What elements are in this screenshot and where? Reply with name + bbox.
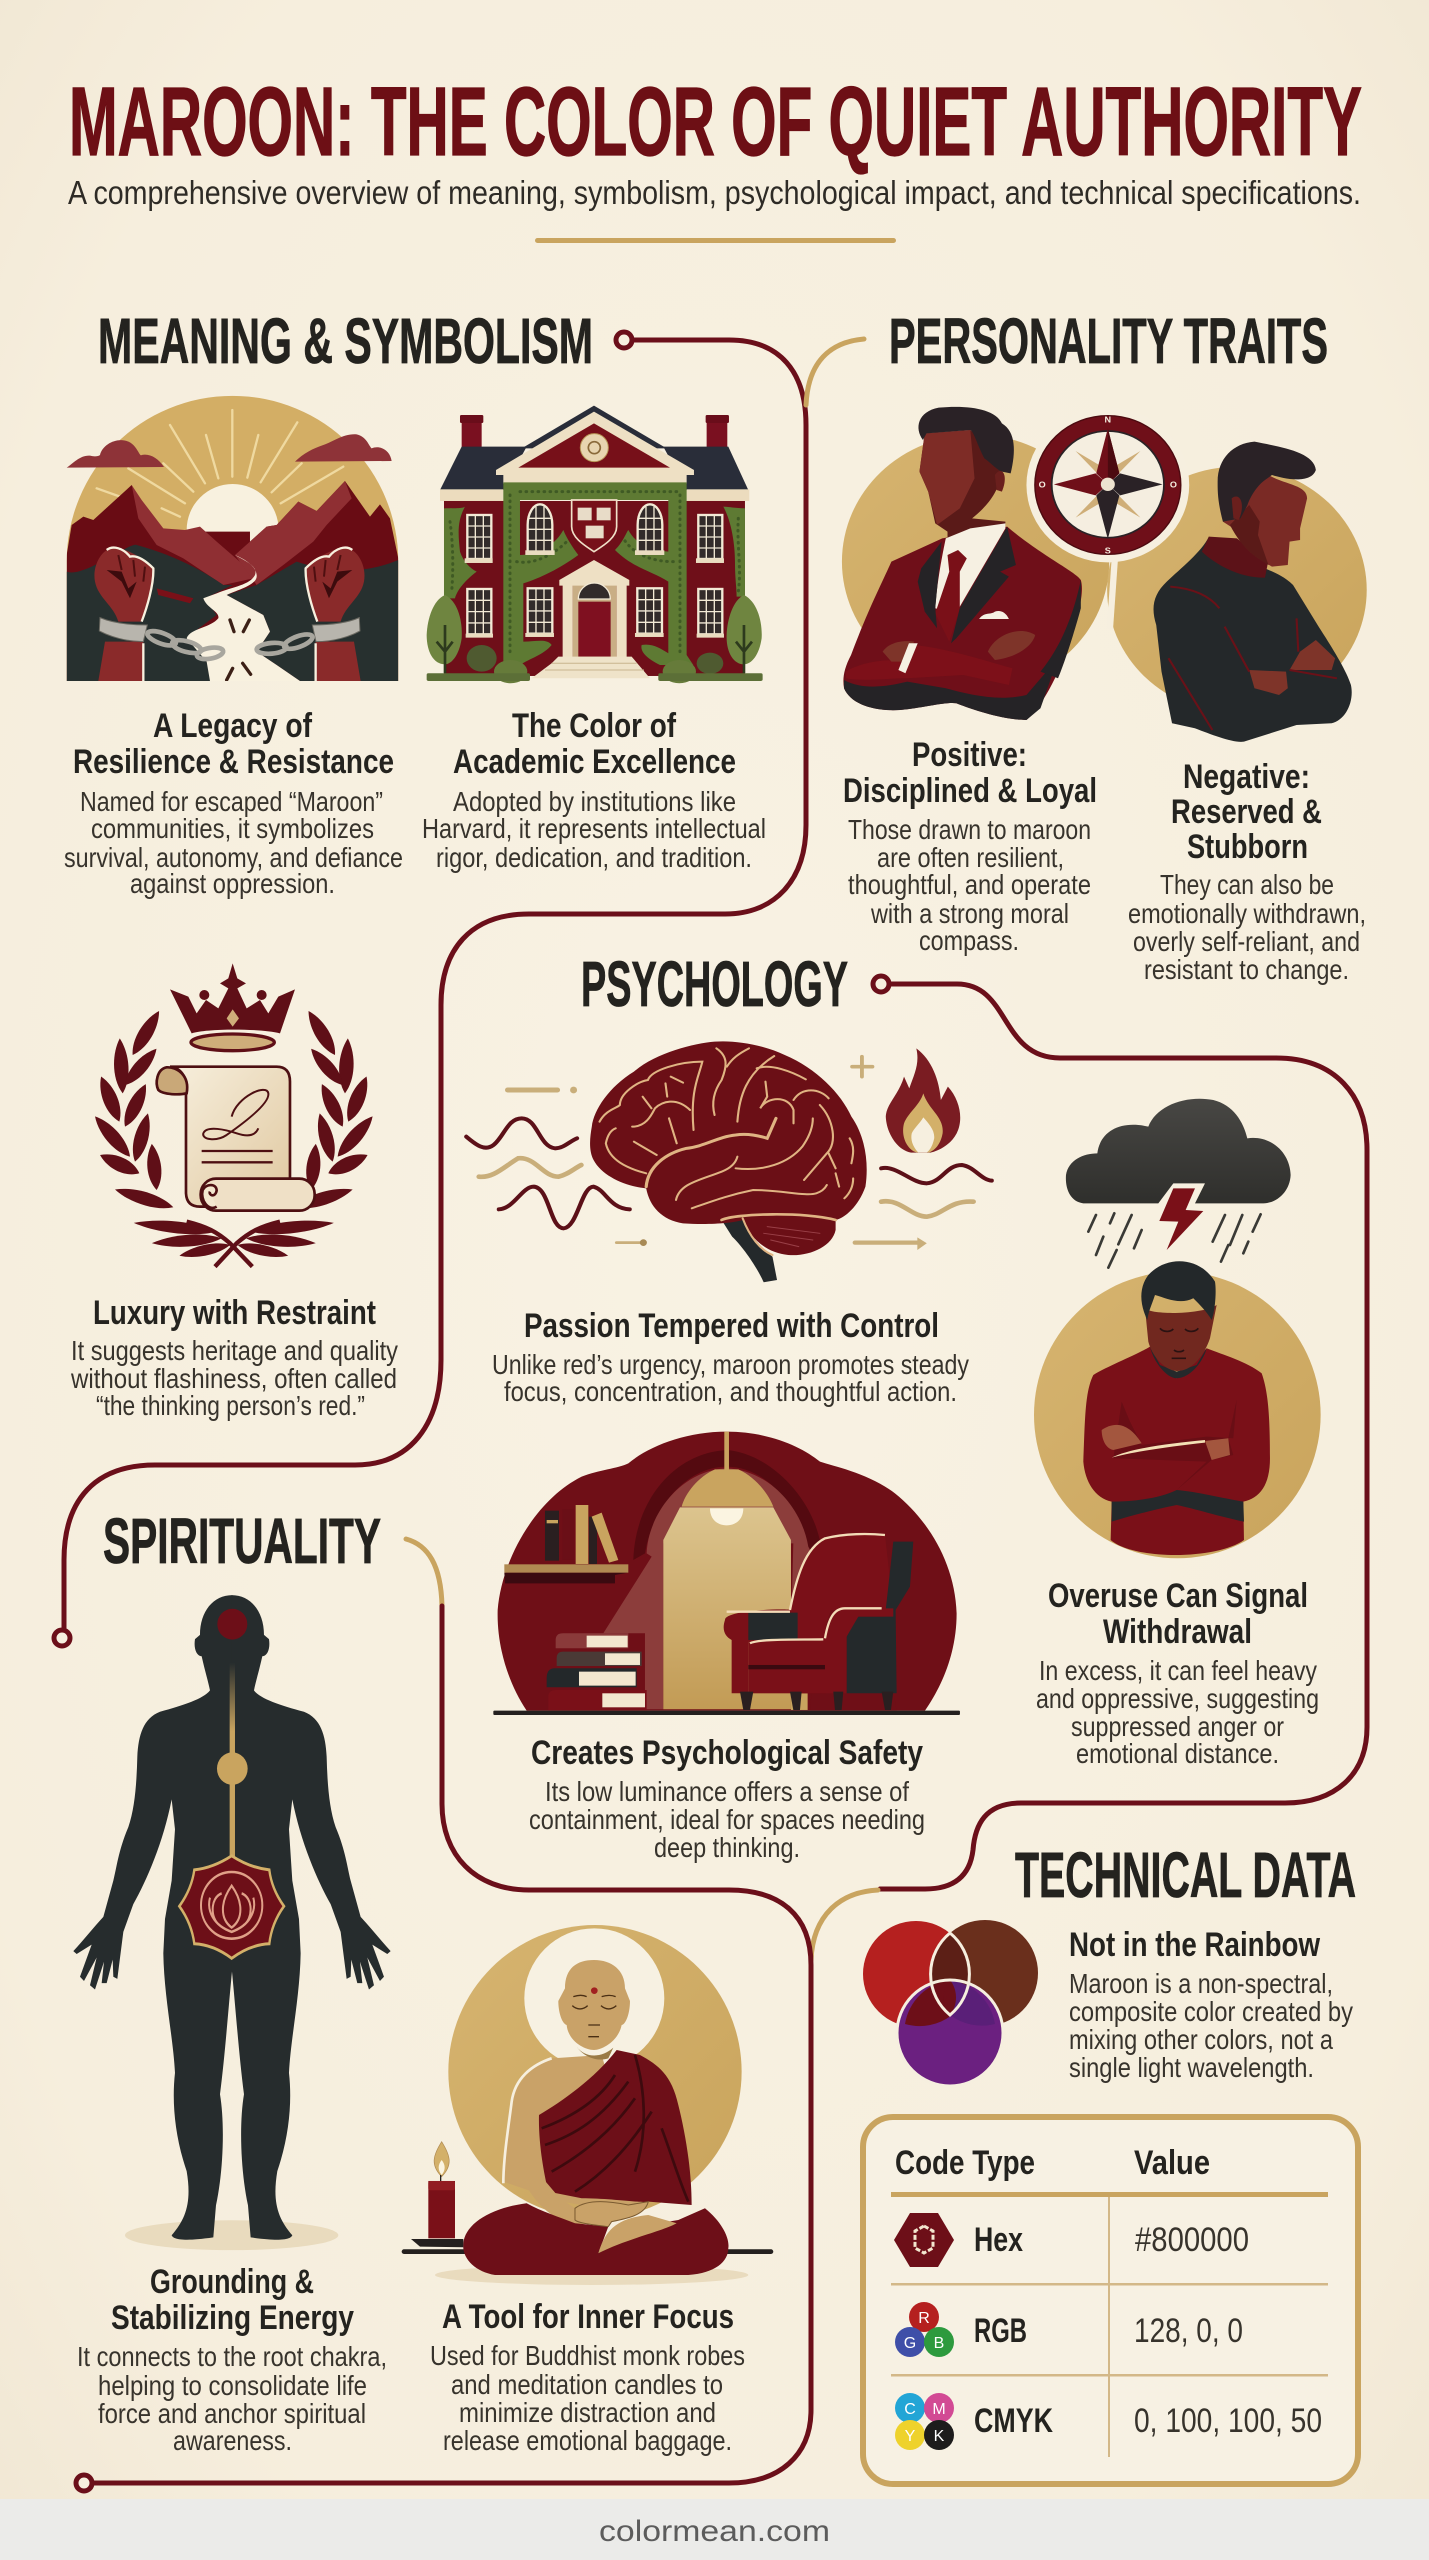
text: negative traits: Stubborn (1187, 828, 1308, 866)
chart: color mixing venn diagram (863, 1920, 1038, 2086)
text: positive traits: thoughtful, and operate (848, 869, 1091, 900)
illustration: broken chains and mountains (67, 395, 400, 682)
text: not in the rainbow (1069, 1926, 1353, 2083)
text: positive traits: compass. (919, 925, 1019, 956)
table header (895, 2144, 1210, 2182)
text: psychological safety (529, 1734, 925, 1863)
illustration: storm cloud over withdrawn man (1034, 1099, 1321, 1558)
text: negative traits: overly self-reliant, and (1133, 926, 1360, 957)
text: grounding energy: Stabilizing Energy (111, 2299, 354, 2337)
windows (467, 504, 722, 634)
text: inner focus: minimize distraction and (459, 2397, 716, 2428)
shackles and chains (99, 618, 147, 642)
row: hex: Hex (974, 2221, 1023, 2259)
icon: moral compass: O (1039, 480, 1046, 489)
row: rgb (895, 2302, 1243, 2357)
text: legacy of resilience: communities, it symbolizes (91, 813, 374, 844)
text: psychological safety: deep thinking. (654, 1832, 800, 1863)
row: rgb: RGB (974, 2312, 1027, 2350)
illustration: gold discs behind figures (842, 408, 1367, 713)
text: academic excellence: The Color of (512, 707, 677, 745)
row: cmyk (895, 2393, 1322, 2450)
text: overuse signal: and oppressive, suggesting (1036, 1683, 1319, 1714)
header (68, 67, 1362, 243)
illustration: brain with waves and flame (466, 1041, 992, 1282)
text: positive traits: with a strong moral (870, 898, 1069, 929)
text: overuse signal: emotional distance. (1076, 1738, 1279, 1769)
portico and door (573, 575, 617, 658)
table header: Value (1134, 2144, 1210, 2182)
row: rgb: B (934, 2335, 944, 2352)
flame (886, 1048, 960, 1153)
text: grounding energy: force and anchor spiritual (98, 2398, 366, 2429)
panel: technical data (863, 1839, 1358, 2484)
text: positive traits: Those drawn to maroon (848, 814, 1091, 845)
text: positive traits: Positive: (912, 736, 1027, 774)
heading: psychology: PSYCHOLOGY (581, 948, 848, 1020)
panel: psychology (466, 948, 1321, 1863)
table header: Code Type (895, 2144, 1035, 2182)
text: positive traits (843, 736, 1097, 956)
armchair (810, 1692, 897, 1711)
text: legacy of resilience: Resilience & Resistance (73, 743, 394, 781)
text: psychological safety: Creates Psychological Safety (531, 1734, 923, 1772)
text: inner focus (430, 2298, 745, 2456)
text: not in the rainbow: Not in the Rainbow (1069, 1926, 1320, 1964)
text: grounding energy: helping to consolidate life (98, 2370, 367, 2401)
text: luxury with restraint (70, 1294, 398, 1421)
text: academic excellence: rigor, dedication, and tradition. (436, 842, 752, 873)
text: luxury with restraint: without flashiness, often called (70, 1363, 397, 1394)
text: negative traits: resistant to change. (1144, 954, 1349, 985)
right arm and fist (306, 548, 365, 681)
row: cmyk: Y (905, 2428, 916, 2445)
illustration: body with root chakra (73, 1595, 391, 2250)
text: overuse signal: In excess, it can feel heavy (1039, 1655, 1317, 1686)
icon: moral compass (1035, 415, 1181, 556)
illustration: meditating monk with candle (402, 1925, 773, 2285)
text: luxury with restraint: “the thinking person’s red.” (96, 1390, 365, 1421)
text: inner focus: A Tool for Inner Focus (442, 2298, 734, 2336)
text: luxury with restraint: Luxury with Restraint (93, 1294, 376, 1332)
heading: meaning and symbolism: MEANING & SYMBOLISM (98, 305, 593, 377)
text: legacy of resilience: against oppression. (130, 868, 335, 899)
icon: moral compass: N (1105, 415, 1111, 424)
text: grounding energy: Grounding & (150, 2263, 314, 2301)
text: legacy of resilience (64, 707, 403, 899)
text: inner focus: Used for Buddhist monk robes (430, 2340, 745, 2371)
text: passion tempered: focus, concentration, and thoughtful action. (504, 1376, 957, 1407)
illustration: negative man in sweater (1154, 442, 1352, 742)
laurel leaves (90, 1007, 378, 1267)
text: not in the rainbow: composite color created by (1069, 1996, 1353, 2027)
footer: colormean.com (599, 2515, 830, 2548)
row: hex: #800000 (1135, 2221, 1249, 2259)
text: negative traits: Negative: (1183, 758, 1310, 796)
connector: personality accent (806, 339, 864, 405)
row: cmyk: C (904, 2401, 916, 2418)
trees and hedges (427, 595, 462, 664)
row: rgb: G (904, 2335, 916, 2352)
text: legacy of resilience: A Legacy of (153, 707, 313, 745)
connector: spirituality to bottom (76, 1539, 811, 2491)
text: passion tempered: Unlike red’s urgency, maroon promotes steady (492, 1349, 969, 1380)
text: inner focus: and meditation candles to (451, 2369, 723, 2400)
text: overuse signal: Overuse Can Signal (1048, 1577, 1308, 1615)
panel: spirituality (73, 1505, 773, 2456)
connector: psychology to technical (811, 976, 1367, 1960)
row: cmyk: M (932, 2401, 946, 2418)
text: overuse signal: Withdrawal (1103, 1613, 1252, 1651)
text: negative traits: emotionally withdrawn, (1128, 898, 1366, 929)
text: academic excellence (422, 707, 766, 873)
text: psychological safety: containment, ideal for spaces needing (529, 1804, 925, 1835)
text: inner focus: release emotional baggage. (443, 2425, 732, 2456)
panel: meaning and symbolism (64, 305, 766, 1421)
crown (170, 963, 295, 1033)
text: overuse signal: suppressed anger or (1071, 1711, 1284, 1742)
text: overuse signal (1036, 1577, 1319, 1769)
bookshelf (504, 1573, 628, 1583)
text: negative traits: Reserved & (1171, 793, 1322, 831)
illustration: reading nook (493, 1432, 960, 1715)
illustration: positive man in suit (843, 407, 1082, 720)
table: color codes (863, 2117, 1358, 2484)
icon: root chakra (179, 1856, 284, 1958)
icon: moral compass: S (1105, 546, 1111, 556)
text: academic excellence: Academic Excellence (453, 743, 736, 781)
text: legacy of resilience: survival, autonomy, and defiance (64, 842, 403, 873)
shield (572, 500, 617, 552)
header divider (535, 238, 896, 243)
text: academic excellence: Adopted by institutions like (453, 786, 736, 817)
text: negative traits: They can also be (1160, 869, 1334, 900)
text: academic excellence: Harvard, it represents intellectual (422, 813, 766, 844)
text: passion tempered (492, 1307, 969, 1407)
text: negative traits (1128, 758, 1366, 985)
text: positive traits: are often resilient, (877, 842, 1064, 873)
row: cmyk: CMYK (974, 2402, 1053, 2440)
text: legacy of resilience: Named for escaped “Maroon” (80, 786, 383, 817)
panel: personality traits (842, 305, 1367, 985)
text: not in the rainbow: single light wavelength. (1069, 2052, 1314, 2083)
icon: moral compass: O (1170, 480, 1177, 489)
left arm and fist (94, 548, 153, 681)
text: grounding energy: awareness. (173, 2425, 292, 2456)
text: grounding energy: It connects to the root chakra, (77, 2341, 387, 2372)
illustration: laurel crown and scroll (90, 963, 378, 1267)
text: grounding energy (77, 2263, 387, 2456)
heading: spirituality: SPIRITUALITY (103, 1505, 381, 1577)
row: cmyk: K (934, 2428, 945, 2445)
footer (0, 2499, 1429, 2560)
text: not in the rainbow: Maroon is a non-spectral, (1069, 1968, 1333, 1999)
row: rgb: 128, 0, 0 (1134, 2312, 1243, 2350)
text: not in the rainbow: mixing other colors, not a (1069, 2024, 1333, 2055)
row: hex (894, 2213, 1249, 2267)
text: psychological safety: Its low luminance offers a sense of (545, 1776, 909, 1807)
book stack (556, 1633, 628, 1648)
illustration: ivy-covered academic building (427, 406, 763, 683)
row: cmyk: 0, 100, 100, 50 (1134, 2402, 1322, 2440)
row: rgb: R (918, 2310, 930, 2327)
text: passion tempered: Passion Tempered with Control (524, 1307, 939, 1345)
scroll (170, 1067, 290, 1207)
text: positive traits: Disciplined & Loyal (843, 772, 1097, 810)
text: luxury with restraint: It suggests heritage and quality (71, 1335, 398, 1366)
connector: meaning to spirituality (54, 332, 806, 1646)
